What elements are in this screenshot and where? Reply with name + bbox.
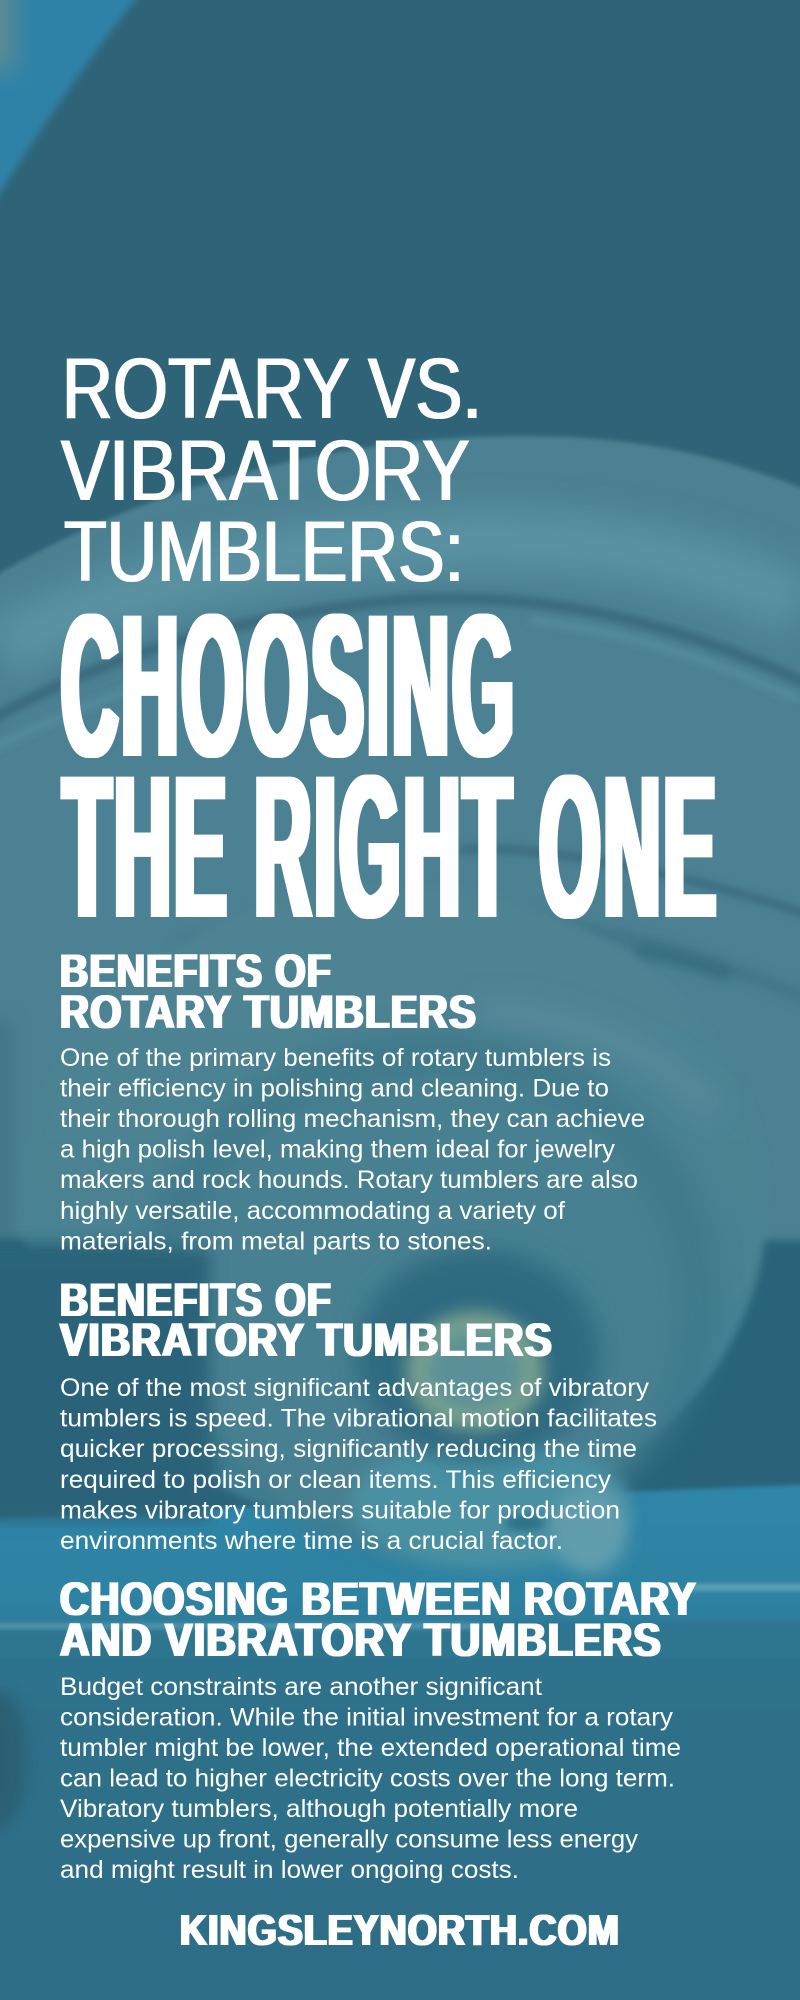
- body text: and might result in lower ongoing costs.: [60, 1856, 519, 1884]
- body text: makes vibratory tumblers suitable for production: [60, 1496, 620, 1524]
- body text: makers and rock hounds. Rotary tumblers are also: [60, 1166, 638, 1194]
- heading: VIBRATORY TUMBLERS: [60, 1313, 553, 1366]
- title: [61, 341, 719, 961]
- title: regular lines: VIBRATORY: [61, 423, 470, 519]
- body text: [60, 1673, 681, 1884]
- panel: benefits of vibratory tumblers: [60, 1273, 657, 1555]
- body text: [60, 1044, 645, 1255]
- heading: ROTARY TUMBLERS: [60, 985, 477, 1038]
- body text: expensive up front, generally consume less energy: [60, 1826, 639, 1854]
- body text: [60, 1374, 657, 1555]
- body text: materials, from metal parts to stones.: [60, 1227, 492, 1255]
- body text: tumblers is speed. The vibrational motion facilitates: [60, 1405, 657, 1433]
- heading: CHOOSING BETWEEN ROTARY: [60, 1572, 697, 1625]
- body text: consideration. While the initial investment for a rotary: [60, 1704, 674, 1732]
- body text: quicker processing, significantly reducing the time: [60, 1435, 637, 1463]
- body text: required to polish or clean items. This efficiency: [60, 1466, 612, 1494]
- panel: benefits of rotary tumblers: [60, 944, 645, 1255]
- title: regular lines: TUMBLERS:: [64, 504, 464, 600]
- heading: BENEFITS OF: [60, 944, 332, 997]
- heading: [60, 1572, 697, 1666]
- body text: can lead to higher electricity costs over the long term.: [60, 1764, 675, 1792]
- footer: website: KINGSLEYNORTH.COM: [180, 1906, 620, 1955]
- body text: tumbler might be lower, the extended operational time: [60, 1734, 681, 1762]
- body text: environments where time is a crucial factor.: [60, 1527, 563, 1555]
- body text: highly versatile, accommodating a variety of: [60, 1197, 565, 1225]
- heading: [60, 1273, 553, 1366]
- title: heavy condensed lines: [61, 572, 719, 961]
- title: regular lines: [61, 341, 482, 600]
- body text: Vibratory tumblers, although potentially more: [60, 1795, 578, 1823]
- body text: Budget constraints are another significant: [60, 1673, 542, 1701]
- body text: their efficiency in polishing and cleaning. Due to: [60, 1075, 609, 1103]
- heading: BENEFITS OF: [60, 1273, 332, 1326]
- heading: [60, 944, 477, 1038]
- panel: choosing between rotary and vibratory tumblers: [60, 1572, 697, 1884]
- title: regular lines: ROTARY VS.: [62, 341, 482, 437]
- body text: their thorough rolling mechanism, they can achieve: [60, 1105, 645, 1133]
- body text: One of the primary benefits of rotary tumblers is: [60, 1044, 611, 1072]
- body text: One of the most significant advantages of vibratory: [60, 1374, 650, 1402]
- heading: AND VIBRATORY TUMBLERS: [60, 1613, 662, 1666]
- body text: a high polish level, making them ideal for jewelry: [60, 1136, 616, 1164]
